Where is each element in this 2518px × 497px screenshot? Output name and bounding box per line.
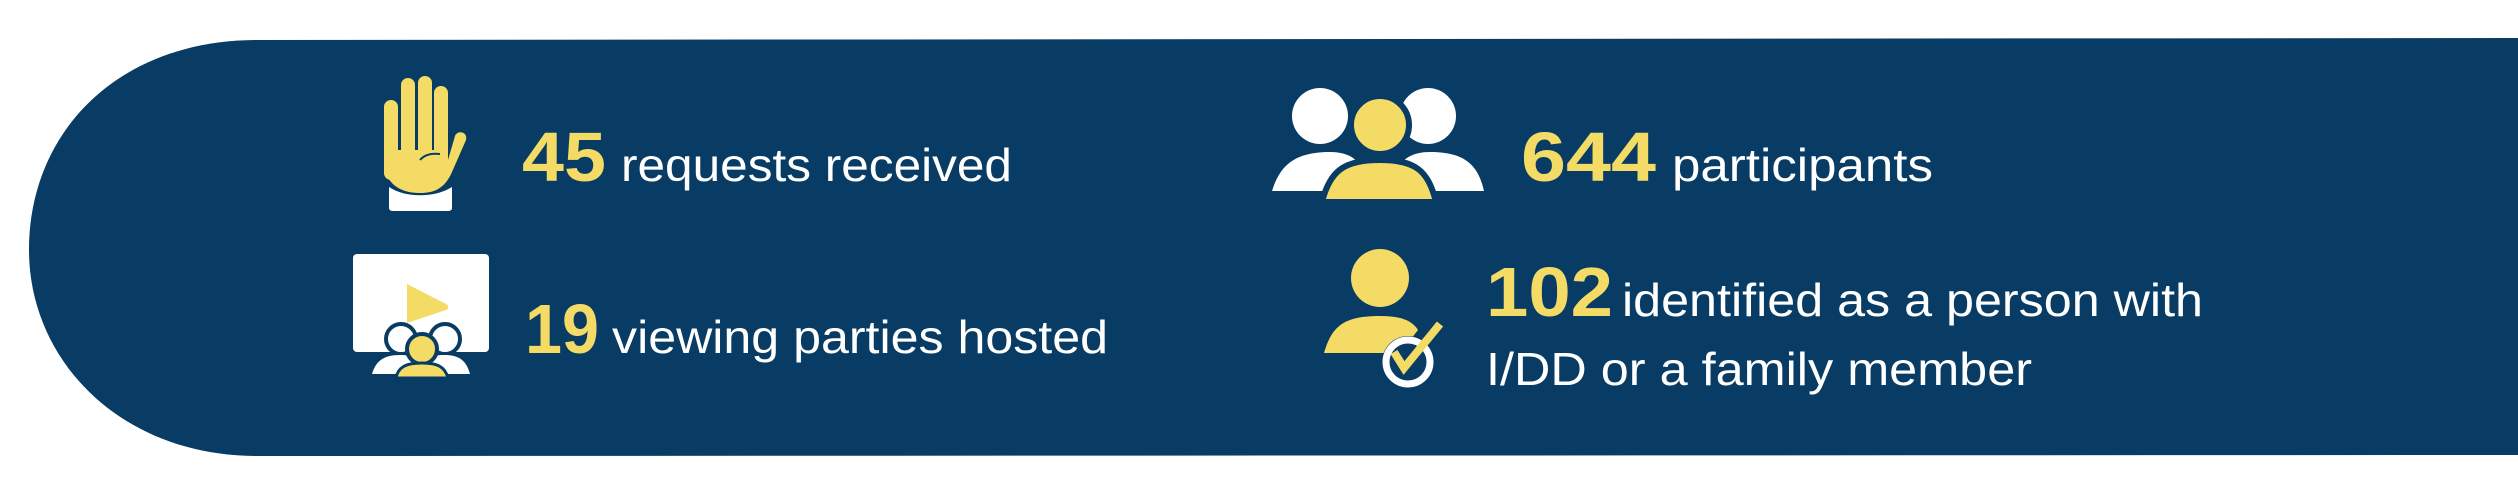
icon: person with check	[1324, 249, 1440, 388]
stat: 19 viewing parties hosted: 19	[525, 290, 599, 368]
stat: 102 identified: identified as a person with	[1622, 274, 2203, 326]
icon: participants group	[1272, 88, 1484, 202]
stat: 19 viewing parties hosted	[525, 290, 1108, 368]
stat: 102 identified: I/DD or a family member	[1486, 343, 2032, 395]
stat: 19 viewing parties hosted: viewing parties hosted	[612, 311, 1108, 363]
icon: viewing party screen	[353, 254, 489, 378]
stat: 45 requests received	[522, 118, 1012, 196]
stat: 102 identified	[1486, 253, 2203, 395]
stat: 45 requests received: requests received	[621, 139, 1012, 191]
stat: 644 participants	[1521, 118, 1933, 196]
stat: 45 requests received: 45	[522, 118, 606, 196]
stat: 102 identified: 102	[1486, 253, 1613, 331]
stat: 644 participants: 644	[1521, 118, 1656, 196]
stat: 644 participants: participants	[1672, 139, 1933, 191]
icon: raised hand	[384, 76, 466, 211]
